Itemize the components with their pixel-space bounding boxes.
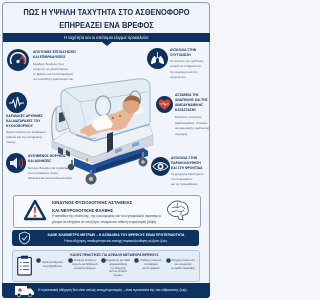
practice 2: με κακούς δρόμους xyxy=(74,267,96,270)
description: μπορεί να οδηγήσει σε υπόξυγία, υπαιμία και πιθανή νευρολογική βλάβη. xyxy=(52,220,157,224)
title: ΕΠΗΡΕΑΖΕΙ ΕΝΑ ΒΡΕΦΟΣ xyxy=(59,20,154,30)
heading: ΚΙΝΔΥΝΟΣ ΦΥΣΙΟΛΟΓΙΚΗΣ ΑΣΤΑΘΕΙΑΣ xyxy=(52,200,132,205)
banner: safety is priority xyxy=(12,230,199,246)
panel: risk of instability xyxy=(13,195,201,228)
description: ρυθμού και της αρτηριακής xyxy=(6,135,42,139)
description xyxy=(171,172,204,186)
practice 1 xyxy=(36,258,63,268)
title: ΠΩΣ Η ΥΨΗΛΗ ΤΑΧΥΤΗΤΑ ΣΤΟ ΑΣΘΕΝΟΦΟΡΟ xyxy=(23,7,190,17)
description: του περιορίζουν xyxy=(171,177,192,181)
item: noise and vibration xyxy=(6,153,73,180)
heading: ΚΑΙ ΝΕΥΡΟΛΟΓΙΚΗΣ ΒΛΑΒΗΣ xyxy=(52,208,113,212)
description: και μειωμένης αιμάτωσης xyxy=(175,126,209,130)
item: oxygenation xyxy=(147,48,204,79)
practice 3: σημείων xyxy=(113,274,123,277)
title xyxy=(23,7,190,30)
heading: ΑΣΤΑΘΕΙΑ ΤΗΣ xyxy=(175,93,199,97)
description xyxy=(52,214,161,224)
description xyxy=(170,59,204,79)
heading: ΠΑΡΑΚΟΛΟΥΘΗΣΗ xyxy=(171,161,201,165)
practice 4 xyxy=(134,258,162,270)
heading xyxy=(28,154,66,163)
description: που προκαλούν στρες, xyxy=(28,171,59,175)
heading: ΟΞΥΓΟΝΩΣΗ xyxy=(170,53,191,57)
description: την ευαίσθητη φυσιολογία του. xyxy=(33,77,74,81)
heading: ΚΑΡΔΙΑΚΕΣ ΑΡΥΘΜΙΕΣ xyxy=(6,114,43,118)
heading: ΚΑΛΕΣ ΠΡΑΚΤΙΚΕΣ ΓΙΑ ΑΣΦΑΛΗ ΜΕΤΑΦΟΡΑ ΒΡΕΦΟΥΣ xyxy=(70,252,159,256)
description: Οι γρήγοροι διαστήματα xyxy=(171,172,203,176)
practice 3: παρακολούθηση xyxy=(109,263,127,266)
description: πίεσης. xyxy=(6,140,16,144)
banner text xyxy=(48,232,184,243)
description: Η αστάθεια της ανάπνοης, της κυκλοφορίας και του εγκεφαλικού αιματισμού xyxy=(52,214,161,218)
heading xyxy=(33,50,76,59)
description: και τις παρεμβάσεις. xyxy=(171,182,198,186)
description: βραδυκαρδίας, απνοιών xyxy=(175,121,208,125)
subtitle banner xyxy=(3,33,210,42)
description xyxy=(6,130,46,144)
heading: ΚΥΚΛΟΦΟΡΙΚΟΥ xyxy=(6,124,33,128)
practice 4: Σταθερή στερέωση xyxy=(141,259,161,262)
description: οξυγόνωση. xyxy=(170,75,186,79)
heading xyxy=(6,114,43,128)
icon: speaker xyxy=(6,153,26,173)
description: μπορεί να επηρεάσουν xyxy=(170,64,201,68)
description: Ταχεία αύξηση του καρδιακού xyxy=(6,130,46,134)
icon: pulse xyxy=(6,92,27,113)
monitor xyxy=(56,105,69,132)
banner pointer xyxy=(102,42,112,46)
icon: brain xyxy=(167,200,189,220)
heading xyxy=(175,93,208,112)
practice 1: Ομαλή επιτάχυνση xyxy=(42,261,63,264)
heading: ΚΑΙ ΕΠΙΒΡΑΔΥΝΣΕΙΣ xyxy=(33,55,66,59)
item: sudden acceleration xyxy=(7,49,76,81)
icon: eye xyxy=(151,157,170,176)
practice 4: και του φορείου xyxy=(142,267,160,270)
banner text: ΚΑΘΕ ΧΙΛΙΟΜΕΤΡΟ ΜΕΤΡΑΕΙ – Η ΑΣΦΑΛΕΙΑ ΤΟΥ ΒΡΕΦΟΥΣ ΕΙΝΑΙ ΠΡΟΤΕΡΑΙΟΤΗΤΑ xyxy=(48,232,184,236)
description xyxy=(175,115,209,136)
description: μπορούν να μετακινήσουν xyxy=(33,67,68,71)
practice 3: Ενημέρωση για ειδικό xyxy=(106,259,130,262)
description: Κίνδυνος υπότασης, xyxy=(175,115,202,119)
description: Έντονοι θόρυβοι και πρόβλημα xyxy=(28,166,70,170)
practice 5: και συνεργασία xyxy=(175,263,191,266)
practice 2: ελιγμών και διαδρομών xyxy=(72,263,98,266)
heading: ΚΑΙ ΣΤΗ ΦΡΟΝΤΙΔΑ xyxy=(171,166,202,170)
mattress xyxy=(76,114,150,139)
heading xyxy=(52,200,132,212)
icon: ambulance xyxy=(14,284,35,296)
practice 3 xyxy=(101,258,130,277)
panel: good practices xyxy=(12,250,200,282)
description: την αφρησμό και την xyxy=(170,70,198,74)
practice 5: Συνεχής επικοινωνία xyxy=(172,259,194,262)
strap xyxy=(107,132,113,153)
banner text: Ήπια οδήγηση, σταθερότητα και συνεχή παρακολούθηση σώζουν ζωές. xyxy=(64,238,168,242)
heading: ΔΥΣΚΟΛΙΑ ΣΤΗΝ xyxy=(171,156,197,160)
cart frame xyxy=(74,147,148,174)
icon: speedometer xyxy=(7,49,29,71)
practice 5 xyxy=(166,258,195,270)
practices list xyxy=(36,258,195,277)
heading: ΔΥΣΚΟΛΙΑ ΣΤΗΝ xyxy=(170,48,196,52)
heading xyxy=(171,156,202,170)
hood xyxy=(61,79,150,139)
description: Σφοδρές δυνάμεις που xyxy=(33,62,64,66)
description: περιοχής. xyxy=(175,132,188,136)
heading: ΚΑΤΑΣΤΑΣΗΣ xyxy=(175,108,196,112)
item: hemodynamic instability xyxy=(156,93,209,136)
footer banner xyxy=(2,283,210,298)
description xyxy=(33,62,74,81)
heading: ΑΠΟΤΟΜΕΣ ΕΠΙΤΑΧΥΝΣΕΙΣ xyxy=(33,50,76,54)
description: το βρέφος και να διαταράξουν xyxy=(33,72,73,76)
heading: ΑΙΜΟΔΥΝΑΜΙΚΗΣ xyxy=(175,103,203,107)
heading: ΚΑΙ ΔΟΝΗΣΕΙΣ xyxy=(28,159,51,163)
base xyxy=(52,126,153,157)
icon: heart xyxy=(156,96,173,113)
heading xyxy=(170,48,196,57)
practice 4: του βρέφους xyxy=(144,263,158,266)
description xyxy=(28,166,73,180)
icon: lungs xyxy=(147,48,168,69)
heading: ΑΥΞΗΜΕΝΟΣ ΘΟΡΥΒΟΣ xyxy=(28,154,66,158)
heading: ΚΑΙ ΔΙΑΤΑΡΑΧΕΣ ΤΟΥ xyxy=(6,119,40,123)
illustration: incubator with baby xyxy=(51,78,154,184)
description: διαφορία και αποσταθεροποίηση. xyxy=(28,176,73,180)
item: monitoring and care xyxy=(151,156,204,186)
description: Οι αυτόνες του ορθώσεις xyxy=(170,59,204,63)
practice 3: της οδήγησης xyxy=(110,267,126,270)
icon: warning triangle xyxy=(24,200,46,220)
baby xyxy=(80,108,134,137)
icon: shield xyxy=(19,232,30,244)
practice 2 xyxy=(68,258,98,270)
practice 2: Αποφυγή απότομων xyxy=(74,259,96,262)
page frame xyxy=(2,2,210,298)
heading: ΑΝΑΠΝΟΗΣ ΚΑΙ ΤΗΣ xyxy=(175,98,208,102)
item: arrhythmia xyxy=(6,92,46,144)
practice 3: και των ζωτικών xyxy=(109,270,127,273)
practice 1: και επιβράδυνση xyxy=(43,265,62,268)
practice 5: με ομάδα παραλαβής xyxy=(171,267,195,270)
subtitle banner: Η ταχύτητα και οι απότομοι ελιγμοί προκαλούν: xyxy=(64,35,149,40)
footer text: Η προσεκτική οδήγηση δεν είναι απλώς επαγγελματισμός – είναι προστασία της πιο εύθραυστης ζωής. xyxy=(38,288,188,292)
icon: clipboard xyxy=(17,256,32,276)
